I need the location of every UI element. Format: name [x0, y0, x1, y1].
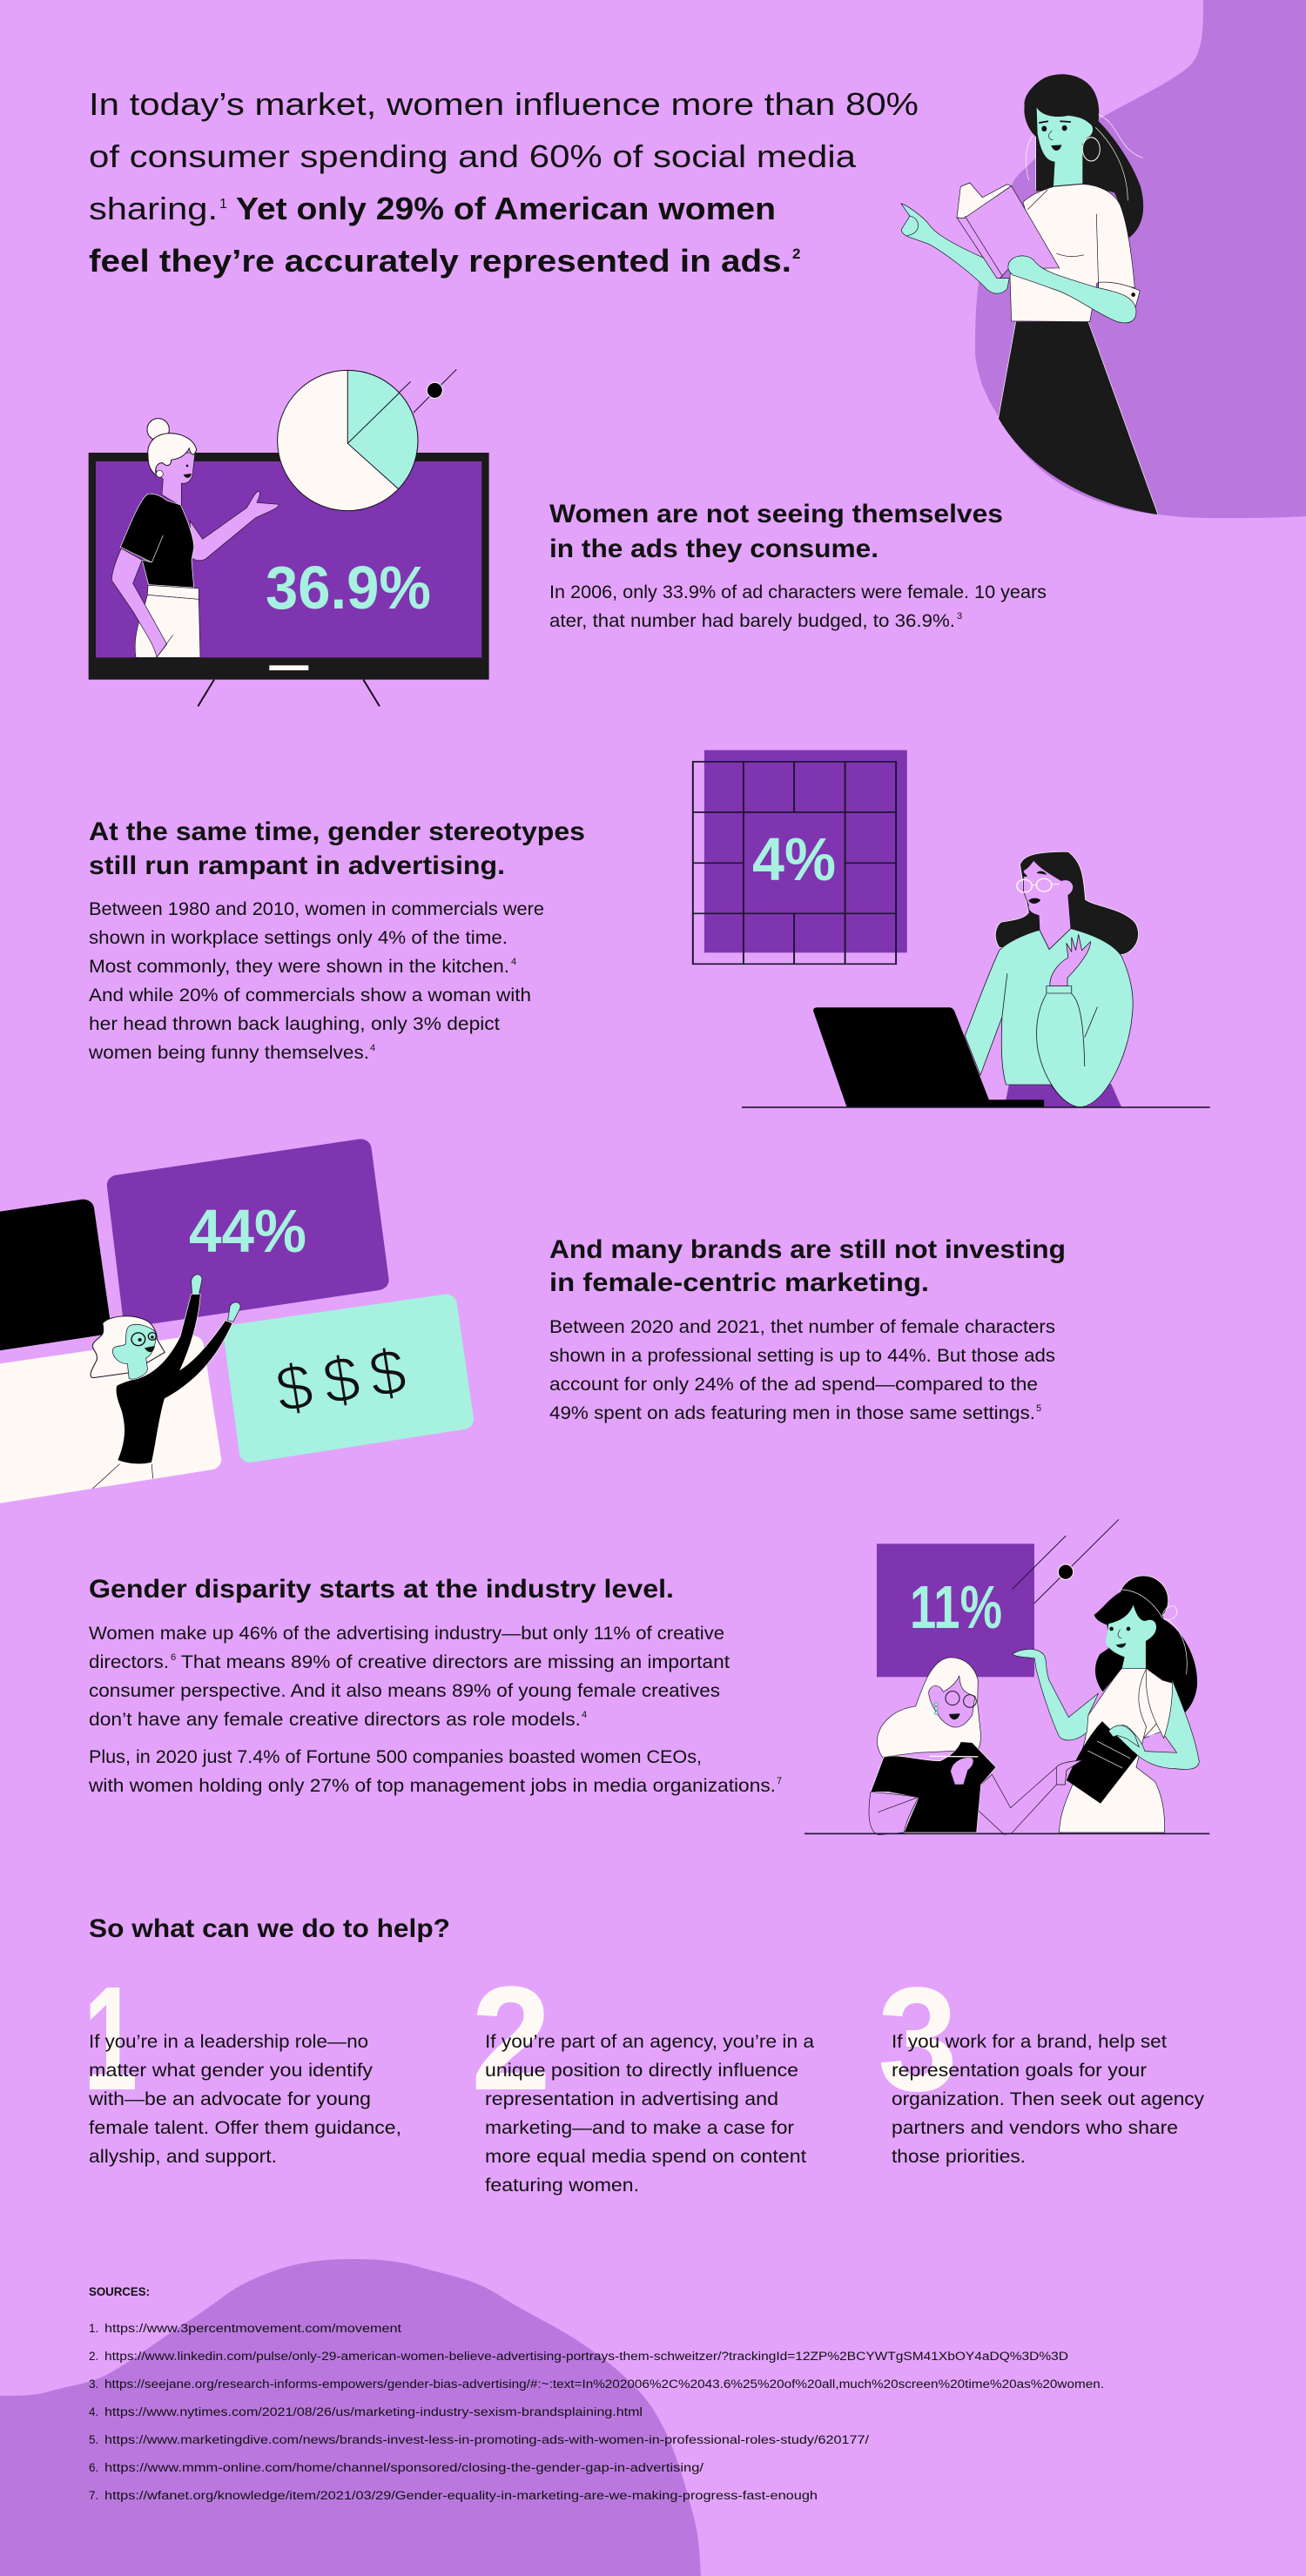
text block: gender stereotypes: 4 [511, 957, 516, 967]
text block: female-centric marketing: Between 2020 and 2021, thet number of female characters [549, 1317, 1055, 1337]
text block: female-centric marketing: 5 [1036, 1403, 1041, 1414]
text block: gender stereotypes: At the same time, gender stereotypes [89, 817, 585, 846]
step 1 text: allyship, and support. [89, 2147, 277, 2167]
intro text: In today’s market, women influence more than 80% [89, 86, 919, 122]
sources: https://www.linkedin.com/pulse/only-29-american-women-believe-advertising-portrays-them-schweitzer/?trackingId=12ZP%2BCYWTgSM41XbOY4aDQ%3D%3D [104, 2350, 1068, 2363]
step 2 text [485, 2032, 814, 2196]
intro text: 2 [792, 245, 800, 262]
number 2: 2 [471, 1956, 551, 2122]
dollar signs [271, 1335, 411, 1426]
text block: industry level: Plus, in 2020 just 7.4% of Fortune 500 companies boasted women CEOs, [89, 1747, 702, 1767]
illustration: TV and presenter [89, 419, 489, 706]
text block: not seeing themselves: in the ads they consume. [549, 535, 879, 563]
intro text [89, 86, 919, 279]
number 3: 3 [878, 1957, 958, 2122]
text block: not seeing themselves: ater, that number had barely budged, to 36.9%. [549, 611, 955, 631]
step 2 text: If you’re part of an agency, you’re in a [485, 2032, 814, 2052]
dollar signs: $ [318, 1342, 365, 1418]
text block: gender stereotypes: Most commonly, they were shown in the kitchen. [89, 957, 509, 977]
text block: female-centric marketing: And many brands are still not investing [549, 1235, 1066, 1264]
text block: gender stereotypes: her head thrown back laughing, only 3% depict [89, 1014, 500, 1034]
text block: gender stereotypes: shown in workplace settings only 4% of the time. [89, 928, 508, 948]
step 2 text: unique position to directly influence [485, 2061, 798, 2081]
sources: https://wfanet.org/knowledge/item/2021/03/29/Gender-equality-in-marketing-are-we-making-progress-fast-enough [104, 2489, 818, 2502]
sources: SOURCES: [89, 2285, 150, 2298]
text block: not seeing themselves: 3 [957, 611, 962, 622]
sources: https://www.mmm-online.com/home/channel/sponsored/closing-the-gender-gap-in-advertising/ [104, 2461, 703, 2474]
illustration: two women talking [804, 1576, 1209, 1835]
step 3 text: those priorities. [892, 2147, 1026, 2167]
stat: 44%: 44% [189, 1197, 306, 1265]
sources: https://www.nytimes.com/2021/08/26/us/marketing-industry-sexism-brandsplaining.html [104, 2405, 643, 2418]
sources: 6. [89, 2461, 98, 2474]
text block: industry level: 4 [582, 1710, 587, 1720]
sources: 5. [89, 2433, 98, 2446]
text block: not seeing themselves: In 2006, only 33.9% of ad characters were female. 10 years [549, 582, 1047, 602]
text block: industry level [88, 1575, 782, 1796]
sources: 3. [89, 2378, 98, 2391]
text block: female-centric marketing: account for only 24% of the ad spend—compared to the [549, 1375, 1038, 1395]
text block: gender stereotypes: 4 [370, 1043, 375, 1053]
purple square with lines [877, 1519, 1119, 1677]
sources: https://www.3percentmovement.com/movement [104, 2322, 401, 2335]
step 3 text [892, 2032, 1205, 2167]
text block: female-centric marketing [549, 1235, 1066, 1423]
step 2 text: marketing—and to make a case for [485, 2118, 794, 2138]
sources: https://seejane.org/research-informs-empowers/gender-bias-advertising/#:~:text=In%202006%2C%2043.6%25%20of%20all,much%20screen%20time%20as%20women. [104, 2378, 1104, 2391]
purple square and grid [693, 750, 907, 964]
intro text: of consumer spending and 60% of social media [89, 138, 857, 174]
step 1 text: with—be an advocate for young [88, 2089, 371, 2109]
step 1 [84, 1956, 401, 2167]
panel: grid with 4% statistic [693, 750, 907, 964]
tilted cards [0, 1149, 463, 1496]
text block: industry level: Women make up 46% of the advertising industry—but only 11% of creative [89, 1624, 724, 1644]
step 3 [878, 1957, 1205, 2167]
step 2 text: featuring women. [485, 2176, 639, 2196]
text block: gender stereotypes: And while 20% of commercials show a woman with [89, 985, 531, 1006]
intro text: 1 [219, 197, 227, 212]
text block: gender stereotypes: women being funny themselves. [88, 1043, 369, 1063]
dollar signs: $ [271, 1349, 318, 1426]
background blob: top right [975, 0, 1306, 518]
step 3 text: organization. Then seek out agency [892, 2089, 1205, 2109]
text block: not seeing themselves [549, 500, 1047, 631]
text block: gender stereotypes [88, 817, 585, 1063]
text block: industry level: consumer perspective. And it also means 89% of young female creatives [89, 1681, 720, 1701]
panel: tilted cards with 44% statistic [0, 1149, 463, 1496]
step 3 text: If you work for a brand, help set [892, 2032, 1167, 2052]
stat: 4%: 4% [752, 825, 836, 893]
step 2 [471, 1956, 814, 2196]
sources: 4. [89, 2405, 98, 2418]
heading: So what can we do to help?: So what can we do to help? [89, 1914, 450, 1943]
text block: gender stereotypes: still run rampant in advertising. [89, 851, 505, 880]
step 1 text [88, 2032, 401, 2167]
stat: 11%: 11% [910, 1573, 1002, 1641]
sources: 2. [89, 2350, 98, 2363]
text block: female-centric marketing: in female-centric marketing. [549, 1268, 929, 1297]
text block: not seeing themselves: Women are not seeing themselves [549, 500, 1003, 528]
text block: industry level: Gender disparity starts at the industry level. [89, 1575, 674, 1604]
illustration: woman reading book [901, 74, 1158, 515]
step 1 text: If you’re in a leadership role—no [89, 2032, 368, 2052]
sources: https://www.marketingdive.com/news/brands-invest-less-in-promoting-ads-with-women-in-professional-roles-study/620177/ [104, 2433, 869, 2446]
stat: 36.9%: 36.9% [266, 554, 431, 622]
step 3 text: representation goals for your [892, 2061, 1147, 2081]
sources: 1. [89, 2322, 98, 2335]
text block: industry level: That means 89% of creative directors are missing an important [181, 1652, 730, 1672]
step 1 text: female talent. Offer them guidance, [89, 2118, 401, 2138]
illustration: woman at laptop [742, 851, 1210, 1107]
step 3 text: partners and vendors who share [892, 2118, 1178, 2138]
number 1: 1 [84, 1956, 138, 2122]
intro text: Yet only 29% of American women [236, 191, 776, 226]
text block: industry level: 7 [777, 1776, 782, 1786]
background blob: bottom left [0, 2259, 701, 2576]
step 2 text: more equal media spend on content [485, 2147, 806, 2167]
dollar signs: $ [364, 1335, 411, 1411]
illustration: woman reaching up [91, 1275, 240, 1489]
panel: 11% statistic with two women [804, 1519, 1209, 1835]
step 1 text: matter what gender you identify [89, 2061, 374, 2081]
text block: female-centric marketing: 49% spent on ads featuring men in those same settings. [549, 1403, 1035, 1423]
pie chart [278, 369, 456, 511]
text block: industry level: with women holding only 27% of top management jobs in media organizations. [88, 1776, 776, 1796]
sources: 7. [89, 2489, 98, 2502]
sources [89, 2285, 1104, 2502]
intro text: sharing. [89, 191, 218, 226]
step 2 text: representation in advertising and [485, 2089, 778, 2109]
text block: industry level: directors. [89, 1652, 169, 1672]
intro text: feel they’re accurately represented in ads. [89, 243, 791, 279]
text block: female-centric marketing: shown in a professional setting is up to 44%. But those ads [549, 1346, 1055, 1366]
text block: gender stereotypes: Between 1980 and 2010, women in commercials were [89, 899, 544, 919]
text block: industry level: 6 [171, 1652, 176, 1663]
text block: industry level: don’t have any female creative directors as role models. [89, 1710, 581, 1730]
panel: TV with 36.9% statistic [89, 369, 489, 706]
